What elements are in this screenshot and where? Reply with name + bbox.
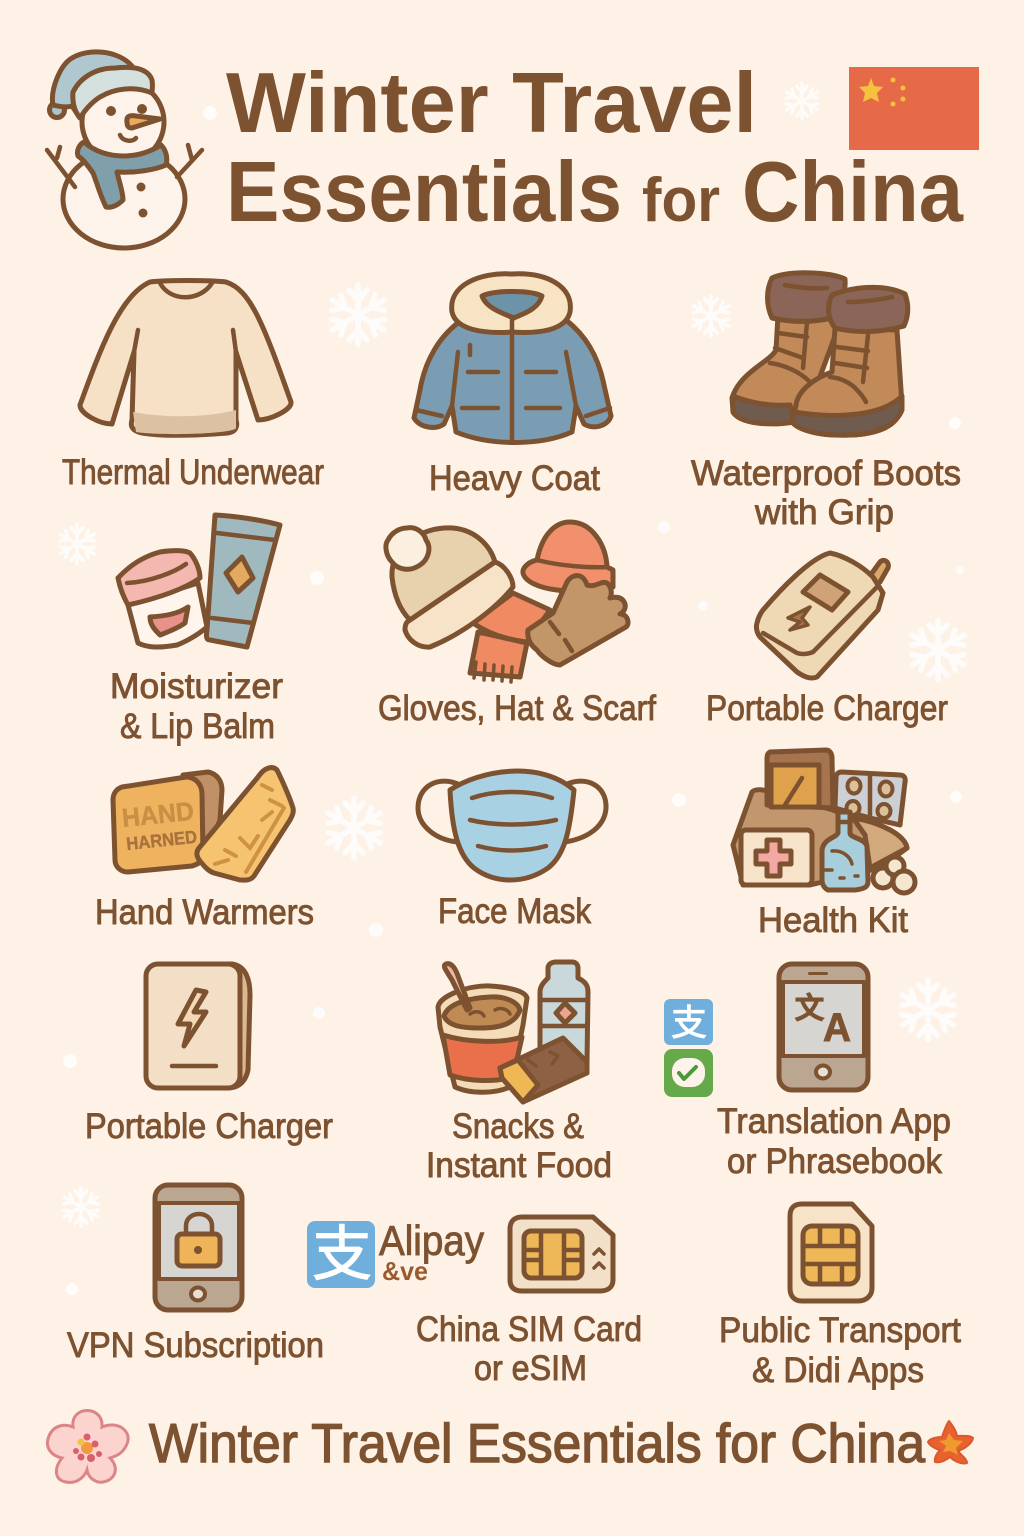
item: translation app [664,964,951,1181]
item: moisturizer and lip balm [110,515,283,746]
item: waterproof boots [691,273,961,532]
item: VPN subscription [67,1185,324,1365]
label: Public Transport [719,1311,961,1350]
item: moisturizer and lip balm: & Lip Balm [120,707,275,746]
label: VPN Subscription [67,1326,324,1365]
icon: phone with padlock [155,1185,242,1310]
label: Health Kit [758,901,908,940]
icon: SIM card [510,1217,613,1291]
icon: SIM chip card [790,1204,872,1301]
item: power bank [85,964,333,1146]
title [226,56,964,240]
label: Snacks & [452,1107,584,1146]
item: hand warmers [95,768,314,932]
label: Heavy Coat [429,459,600,498]
icon: warmer packets [113,768,293,880]
label: Portable Charger [85,1107,333,1146]
icon: winter accessories [386,522,628,682]
icon: Alipay badge: 支 [671,1002,707,1043]
item: waterproof boots: with Grip [754,493,894,532]
icon: puffer coat [414,274,611,442]
title: Winter Travel [226,56,757,151]
icon: orange flower [928,1421,973,1463]
item: health kit [733,750,915,940]
title: China [742,145,964,240]
item: portable charger [706,553,948,728]
label: Gloves, Hat & Scarf [378,689,656,728]
icon: translation phone: A [823,1006,851,1050]
item: public transport and Didi apps: & Didi Apps [752,1351,924,1390]
icon: WeChat check badge [664,1049,713,1097]
item: Alipay logo [307,1217,484,1288]
item: China SIM card: or eSIM [474,1349,587,1388]
icon: translation phone [779,964,868,1090]
item: snacks and instant food: Instant Food [426,1146,612,1185]
icon: noodles, bottle and chocolate [438,962,588,1102]
icon: Alipay badge [664,999,713,1045]
icon: surgical mask [418,771,606,880]
closing title: Winter Travel Essentials for China [149,1412,925,1474]
label: Moisturizer [110,667,283,706]
item: Alipay logo: &ve [382,1256,428,1286]
icon: tube and jar [118,515,280,647]
icon: Alipay square: 支 [312,1221,372,1288]
label: Hand Warmers [95,893,314,932]
label: Waterproof Boots [691,454,961,493]
icon: snowman [47,52,202,248]
item: China SIM card [416,1217,642,1388]
icon: boots [732,273,908,435]
item: translation app: or Phrasebook [727,1142,942,1181]
title: for [642,166,720,235]
wordmark: Alipay [379,1217,484,1264]
label: Face Mask [438,892,591,931]
item: snacks and instant food [426,962,612,1185]
icon: plum blossom [47,1410,128,1482]
icon: translation phone: 文 [795,991,825,1025]
icon: warmer packets: HAND [120,796,195,833]
label: Translation App [717,1102,951,1141]
icon: thermal top [80,280,291,435]
icon: power bank [146,964,250,1088]
label: Thermal Underwear [62,453,324,492]
icon: medical supplies [733,750,915,893]
item: thermal underwear [62,280,324,492]
item: gloves, hat and scarf [378,522,656,728]
title: Essentials [226,145,622,240]
label: China SIM Card [416,1310,642,1349]
item: heavy coat [414,274,611,498]
item: public transport and Didi apps [719,1204,961,1390]
label: Portable Charger [706,689,948,728]
icon: charger pouch [756,553,888,678]
icon: warmer packets: HARNED [125,827,198,854]
icon: China flag [849,67,979,150]
item: face mask [418,771,606,931]
footer [47,1410,973,1482]
